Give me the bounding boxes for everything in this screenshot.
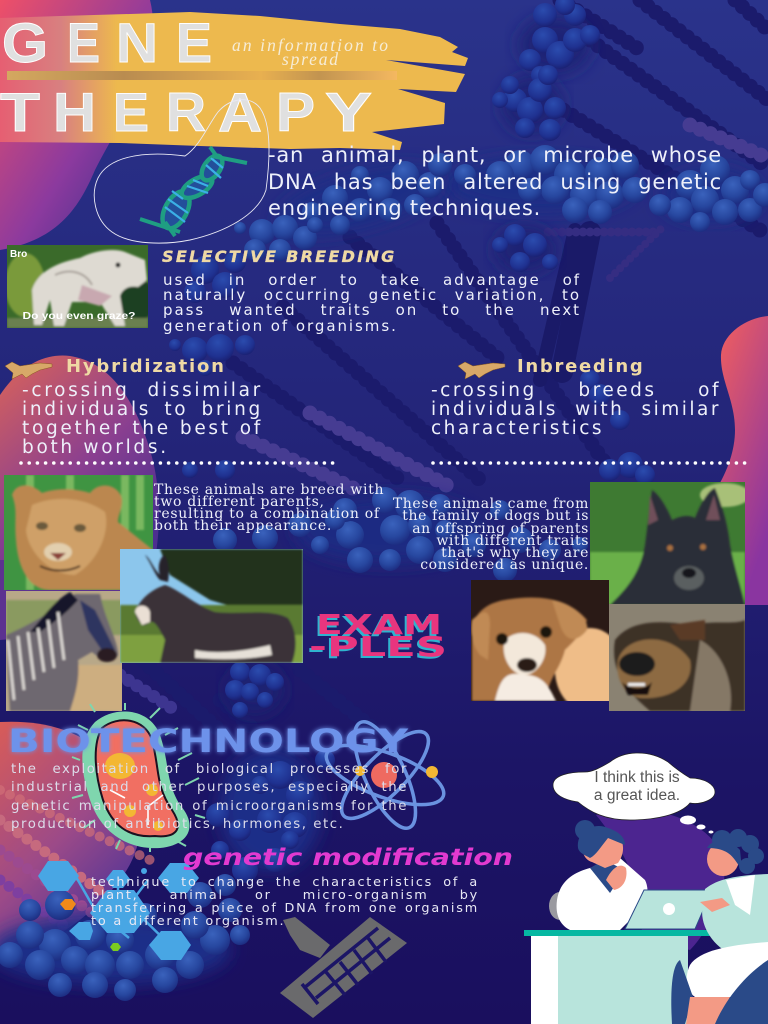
inbred examples caption: These animals came from [393,496,589,512]
icon: leopard right [458,362,505,379]
selective breeding text: naturally occurring genetic variation, to [163,286,581,304]
EXAM -PLES sticker: EXAM [316,608,442,641]
title GENE: G [2,11,48,74]
purple backdrop behind people [596,809,725,950]
selective breeding text: pass wanted traits on to the next [163,301,581,319]
subtitle [232,35,388,69]
heading: selective breeding: SELECTIVE BREEDING [162,247,397,266]
biotechnology text: genetic manipulation of microorganisms for the [11,799,408,814]
hybrid examples caption: resulting to a combination of [154,506,380,522]
genetic modification text: technique to change the characteristics of a [91,874,479,890]
EXAM -PLES sticker [307,608,447,665]
title THERAPY: P [276,81,315,143]
photo: shepherd mix [609,604,745,711]
hybrid examples caption: These animals are breed with [154,482,384,498]
selective breeding text: generation of organisms. [163,317,398,335]
hybridization text: -crossing dissimilar [22,380,263,401]
selective breeding text: used in order to take advantage of [163,271,581,289]
bead cluster mid dark [169,224,655,485]
gradient blob right [716,316,768,605]
title THERAPY: T [0,81,40,143]
heading: hybridization: Hybridization [66,356,226,377]
inbreeding text [431,380,721,439]
EXAM -PLES sticker: -PLES [309,630,447,663]
photo: black belgian shepherd [590,482,750,605]
inbred examples caption [393,496,589,573]
definition text: DNA has been altered using genetic [268,170,722,194]
definition text: engineering techniques. [268,196,541,220]
hybridization text: together the best of [22,418,263,439]
icon: dna helix [140,147,247,236]
photo: zebra hybrid [6,591,122,711]
photo: liger [4,475,153,590]
biotechnology text [11,762,408,832]
thought bubble: I think this is [594,769,680,786]
title THERAPY: R [166,81,206,143]
left doctor [557,820,648,930]
title THERAPY: Y [325,81,372,143]
subtitle: an information to [232,35,388,55]
bead cluster upper dna [492,0,600,141]
icon: bacterium [72,703,205,852]
hybrid examples caption: two different parents, [154,494,325,510]
heading: biotechnology: BIOTECHNOLOGY [8,722,409,760]
gradient blob lower left [0,722,140,960]
inbred examples caption: with different traits [436,533,589,549]
gold foil rule [7,71,397,80]
inbreeding text: -crossing breeds of [431,380,721,401]
chair [549,892,571,920]
definition text: -an animal, plant, or microbe whose [268,143,722,167]
outline loop [94,100,269,243]
title THERAPY [0,81,372,143]
bead cluster middle dna [234,145,768,261]
purple strands lower left [0,790,150,930]
inbreeding text: characteristics [431,418,604,439]
dna bead strands [120,0,768,760]
biotechnology text: industrial and other purposes, especially the [11,780,408,795]
selective breeding text [163,271,581,335]
subtitle: spread [282,49,338,69]
hybridization text: both worlds. [22,437,169,458]
genetic modification text: plant, animal or micro-organism by [91,888,479,903]
biotechnology text: production of antibiotics, hormones, etc. [11,817,344,832]
corner gradient blob top left [0,0,153,250]
EXAM -PLES sticker: -PLES [307,632,445,665]
title GENE: N [116,11,158,74]
hybrid examples caption: both their appearance. [154,518,332,534]
laptop [625,890,712,929]
inbreeding text: individuals with similar [431,399,721,420]
inbred examples caption: considered as unique. [420,557,589,573]
scene: doctors talking [524,753,768,1024]
thought bubble [553,753,715,834]
photo: muscular bull meme: Do you even graze? [22,310,136,322]
definition text [268,143,722,220]
dotted divider left [21,461,334,465]
hybrid examples caption [154,482,384,534]
icon: gray dna [280,917,407,1018]
title GENE [2,11,212,74]
gradient blob behind hybridization [0,356,159,560]
right doctor [671,829,768,1024]
photo: beagle puppy [471,580,609,701]
title GENE: E [67,11,100,74]
genetic modification text: transferring a piece of DNA from one organism [91,901,479,916]
title THERAPY: A [218,81,262,143]
title THERAPY: H [53,81,96,143]
genetic modification text [91,874,479,929]
bead cluster lower left [0,874,250,1001]
photo: muscular bull meme: Bro [10,249,27,260]
bead cluster below donkey [206,662,335,883]
inbred examples caption: that's why they are [441,545,589,561]
heading: inbreeding: Inbreeding [517,356,644,377]
bead cluster center [213,487,588,582]
icon: atom [319,714,451,836]
title GENE: E [176,11,212,74]
desk [524,930,714,1024]
genetic modification text: to a different organism. [91,914,285,929]
thought bubble: a great idea. [594,787,680,804]
yellow brush stroke [0,12,468,150]
dotted divider right [433,461,748,465]
EXAM -PLES sticker: EXAM [314,610,440,643]
icon: molecule hexagons [38,861,199,960]
heading: genetic modification: genetic modification [183,845,513,871]
title THERAPY: E [113,81,149,143]
hybridization text [22,380,263,458]
hybridization text: individuals to bring [22,399,263,420]
inbred examples caption: an offspring of parents [412,521,589,537]
icon: leopard left [5,362,52,379]
biotechnology text: the exploitation of biological processes for [11,762,408,777]
inbred examples caption: the family of dogs but is [402,508,589,524]
photo: donkey [120,549,303,663]
photo: muscular bull meme [5,245,155,328]
